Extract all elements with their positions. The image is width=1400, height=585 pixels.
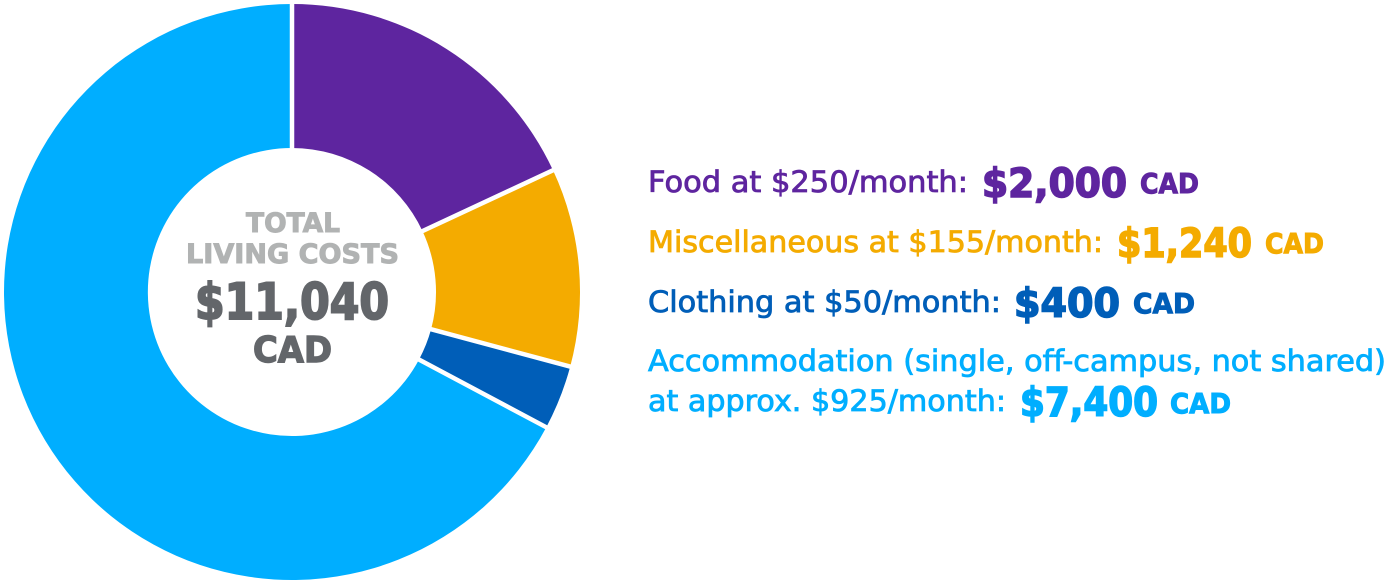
- accommodation label line 2: at approx. $925/month:: [648, 384, 1006, 418]
- miscellaneous currency: CAD: [1265, 228, 1324, 260]
- segment: miscellaneous: [422, 170, 580, 367]
- legend: clothing: [648, 281, 1195, 327]
- center heading: total: TOTAL: [246, 208, 340, 239]
- miscellaneous label: Miscellaneous at $155/month:: [648, 225, 1103, 259]
- food amount: $2,000: [982, 161, 1127, 207]
- legend: food: [648, 161, 1199, 207]
- segment: clothing: [419, 329, 570, 427]
- center total amount: $11,040: [195, 273, 389, 331]
- clothing amount: $400: [1014, 281, 1120, 327]
- legend: accommodation: [648, 344, 1386, 426]
- legend: miscellaneous: [648, 221, 1324, 267]
- clothing currency: CAD: [1133, 288, 1195, 320]
- center heading: living costs: LIVING COSTS: [186, 239, 399, 270]
- miscellaneous amount: $1,240: [1117, 221, 1252, 267]
- clothing label: Clothing at $50/month:: [648, 285, 1001, 319]
- segment: food: [292, 4, 553, 231]
- center label: [186, 208, 399, 371]
- food label: Food at $250/month:: [648, 165, 968, 199]
- center currency: CAD: [253, 330, 332, 371]
- accommodation amount: $7,400: [1020, 380, 1158, 426]
- accommodation currency: CAD: [1170, 388, 1231, 420]
- donut chart: [4, 0, 580, 580]
- food currency: CAD: [1140, 168, 1199, 200]
- accommodation label line 1: Accommodation (single, off-campus, not shared): [648, 344, 1386, 378]
- segment: accommodation: [4, 4, 546, 580]
